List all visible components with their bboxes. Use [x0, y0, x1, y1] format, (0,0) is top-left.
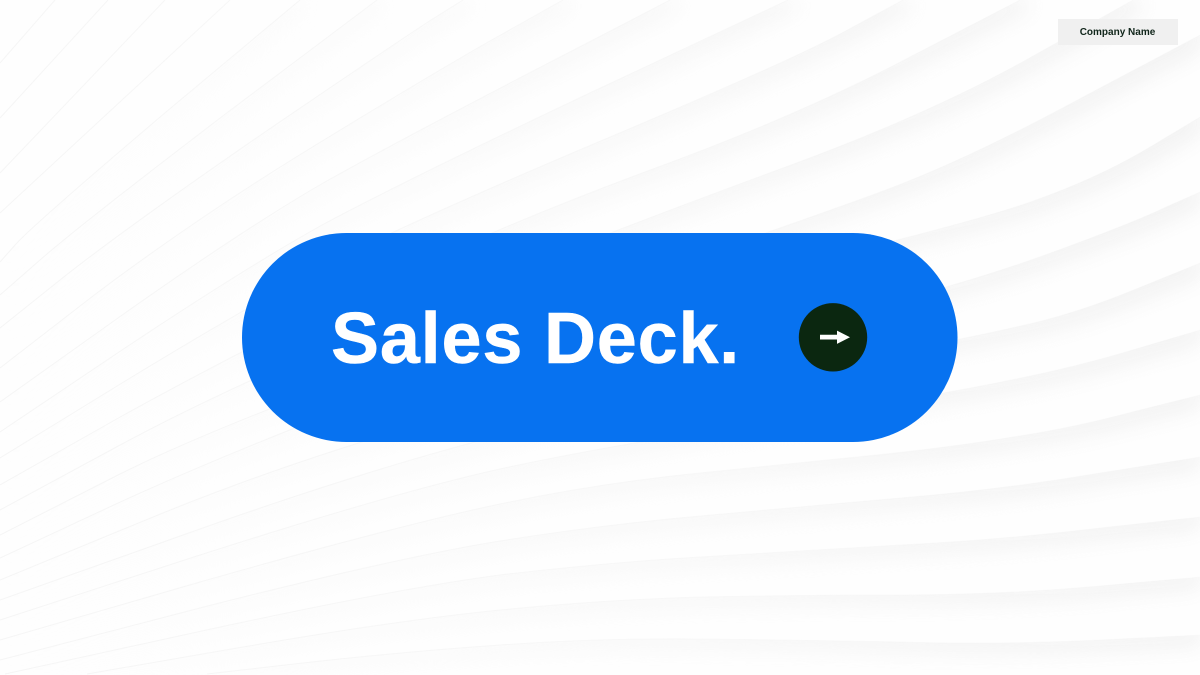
panel: blue title pill	[242, 233, 958, 442]
icon: arrow button	[799, 303, 867, 371]
company name tag	[1058, 19, 1178, 45]
title: Sales Deck.	[331, 299, 740, 379]
company name tag: Company Name	[1080, 27, 1156, 38]
